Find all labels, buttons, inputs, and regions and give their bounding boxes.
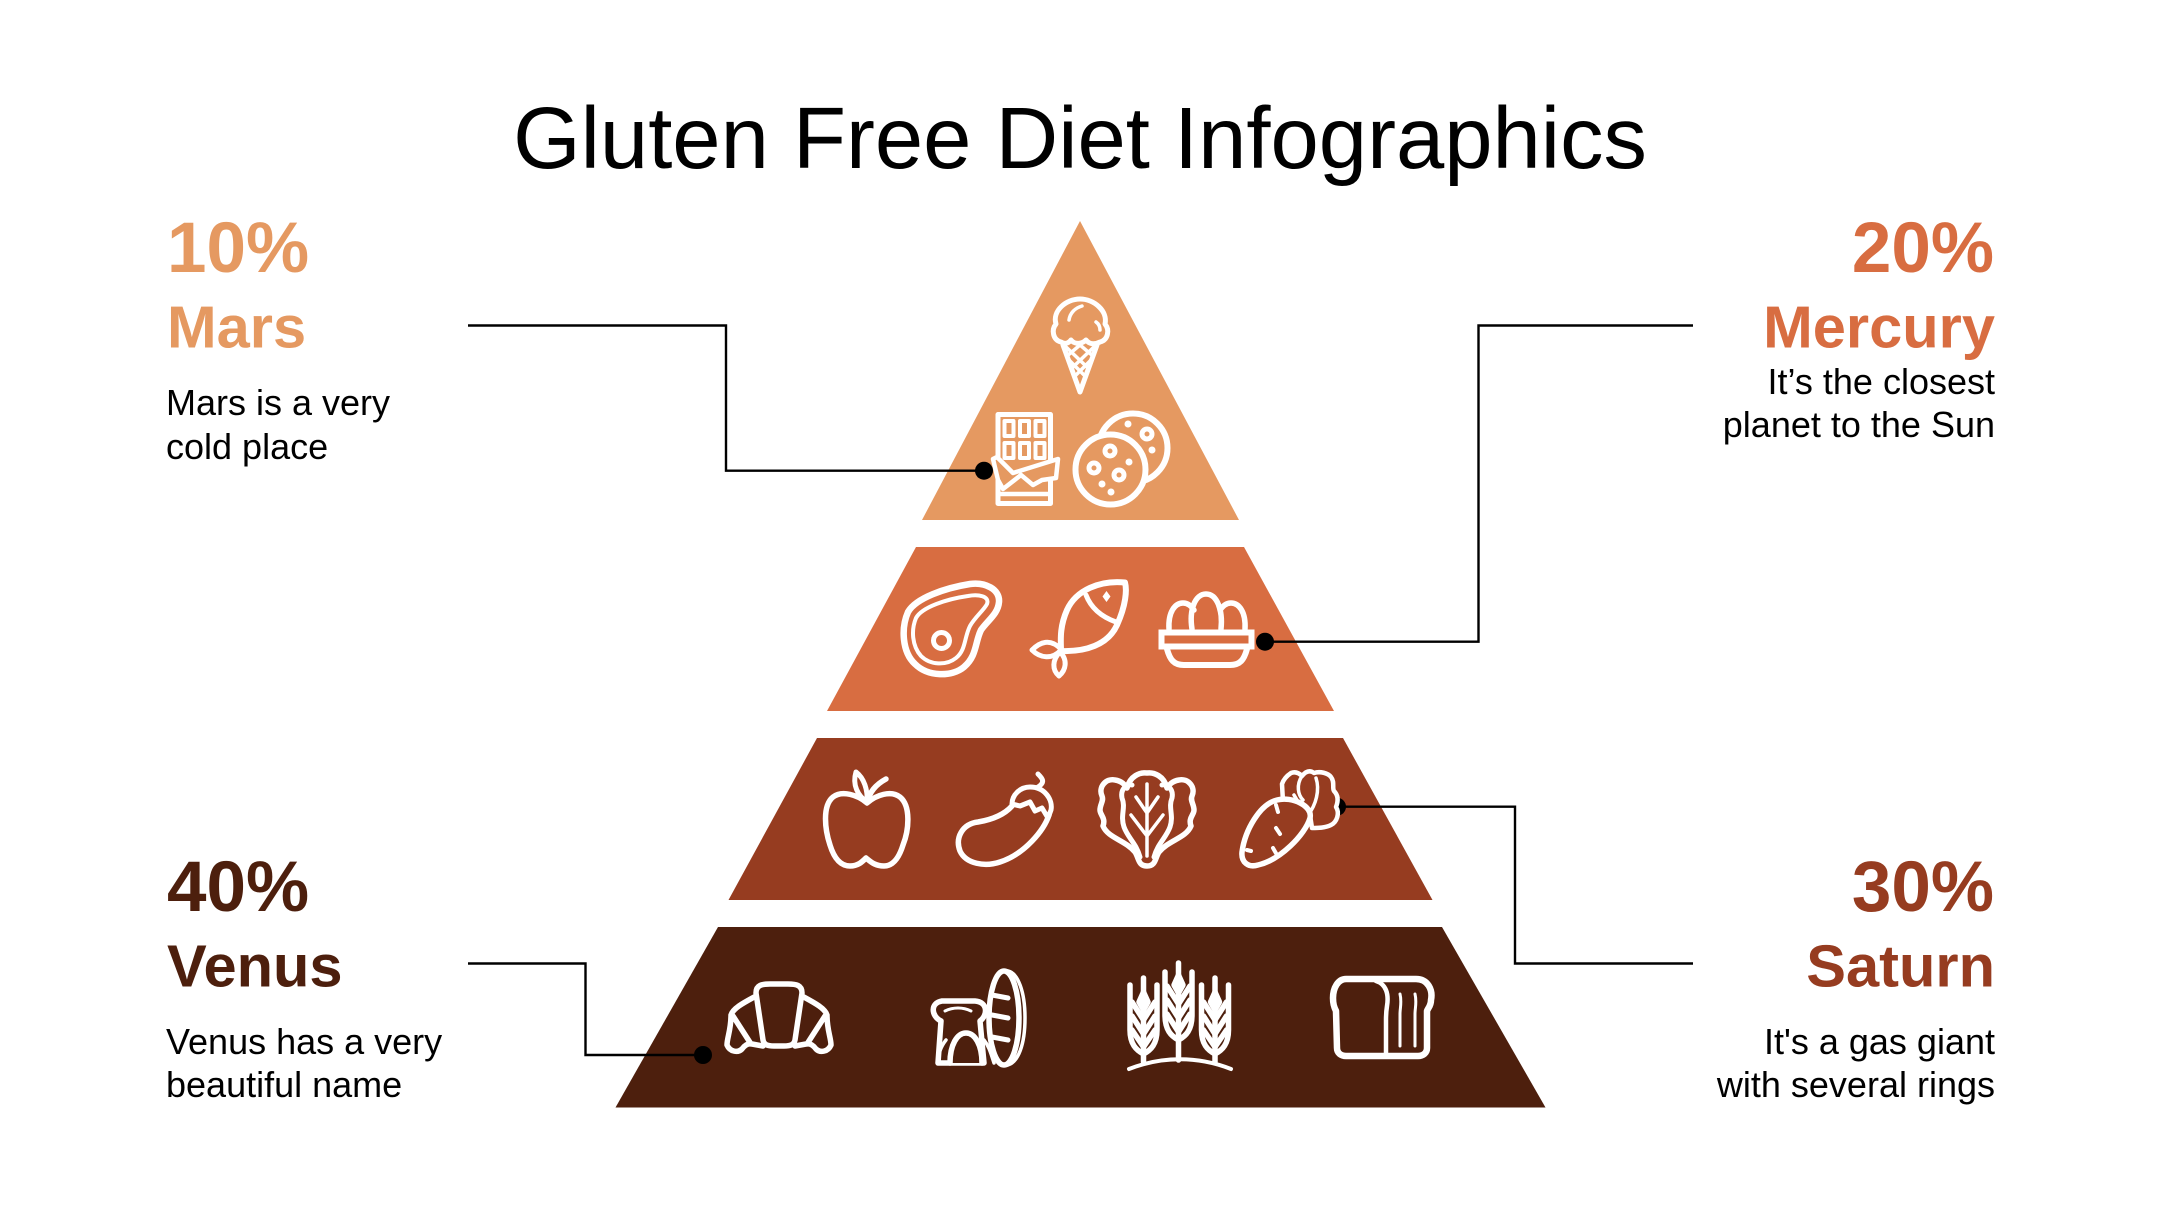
pyramid tier 1: sweets: [922, 221, 1239, 520]
icon: chocolate bar: [993, 414, 1058, 504]
icon: bread slice: [1333, 979, 1431, 1056]
icon: fish: [1032, 582, 1126, 676]
text block: Mars: Mars is a very: [166, 382, 390, 423]
title: Gluten Free Diet Infographics: [513, 90, 1647, 187]
connector: Saturn to tier 3: [1328, 798, 1693, 964]
text block: Mercury: Mercury: [1763, 294, 1995, 360]
icon: croissant: [727, 984, 831, 1051]
text block: Saturn: [1716, 848, 1995, 1105]
text block: Mercury: 20%: [1852, 209, 1994, 288]
text block: Mars: 10%: [167, 209, 309, 288]
text block: Mars: Mars: [167, 294, 306, 360]
icon: lettuce: [1100, 773, 1194, 866]
icon: eggplant: [958, 774, 1051, 864]
pyramid tier 3: vegetables: [728, 738, 1432, 900]
text block: Mercury: [1723, 209, 1995, 445]
text block: Mercury: It’s the closest: [1768, 361, 1995, 402]
text block: Saturn: It's a gas giant: [1764, 1021, 1995, 1062]
text block: Venus: beautiful name: [166, 1064, 402, 1105]
pyramid tier 2: protein: [827, 547, 1334, 711]
text block: Saturn: Saturn: [1806, 932, 1995, 1000]
text block: Saturn: 30%: [1852, 848, 1994, 927]
text block: Saturn: with several rings: [1716, 1064, 1995, 1105]
connector: Mercury to tier 2: [1256, 326, 1693, 651]
text block: Venus: [166, 848, 442, 1105]
text block: Venus: 40%: [167, 848, 309, 927]
text block: Mars: cold place: [166, 426, 328, 467]
icon: egg basket: [1162, 594, 1252, 665]
icon: bread and baguette: [933, 971, 1025, 1065]
icon: wheat: [1129, 963, 1231, 1069]
text block: Mercury: planet to the Sun: [1723, 404, 1995, 445]
icon: carrot: [1242, 771, 1338, 866]
connector: Mars to tier 1: [468, 326, 993, 480]
pyramid tier 4: grains: [616, 927, 1546, 1108]
text block: Venus: Venus has a very: [166, 1021, 442, 1062]
icon: steak: [904, 584, 999, 674]
icon: cookies: [1076, 414, 1168, 504]
connector: Venus to tier 4: [468, 964, 712, 1064]
icon: ice cream: [1053, 299, 1108, 392]
text block: Venus: Venus: [167, 932, 343, 1000]
text block: Mars: [166, 209, 390, 467]
icon: apple: [826, 772, 908, 866]
